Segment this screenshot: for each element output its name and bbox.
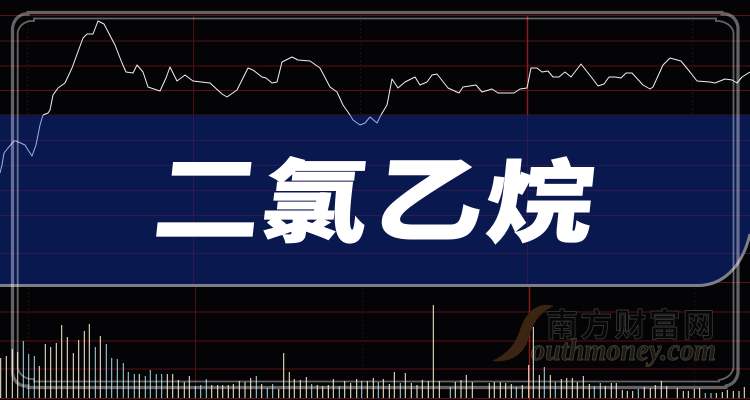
watermark swoosh	[492, 305, 554, 361]
grid lines through band	[0, 115, 750, 284]
blue volume bars	[23, 341, 711, 398]
price line above band	[43, 21, 750, 115]
title character er: 二	[147, 116, 271, 266]
volume bars	[1, 305, 744, 398]
band outline	[0, 234, 750, 286]
title character yi: 乙	[369, 126, 492, 262]
price line inside band	[0, 115, 381, 173]
price line chart	[0, 21, 750, 173]
watermark chinese name: 南方财富网	[546, 300, 717, 346]
cream volume bars	[1, 305, 744, 398]
title character wan: 烷	[480, 130, 601, 261]
watermark: southmoney logo	[492, 300, 717, 367]
title	[147, 116, 601, 266]
watermark url: outhmoney.com	[531, 332, 716, 367]
blue title band	[0, 115, 750, 285]
title character lv: 氯	[256, 131, 375, 261]
